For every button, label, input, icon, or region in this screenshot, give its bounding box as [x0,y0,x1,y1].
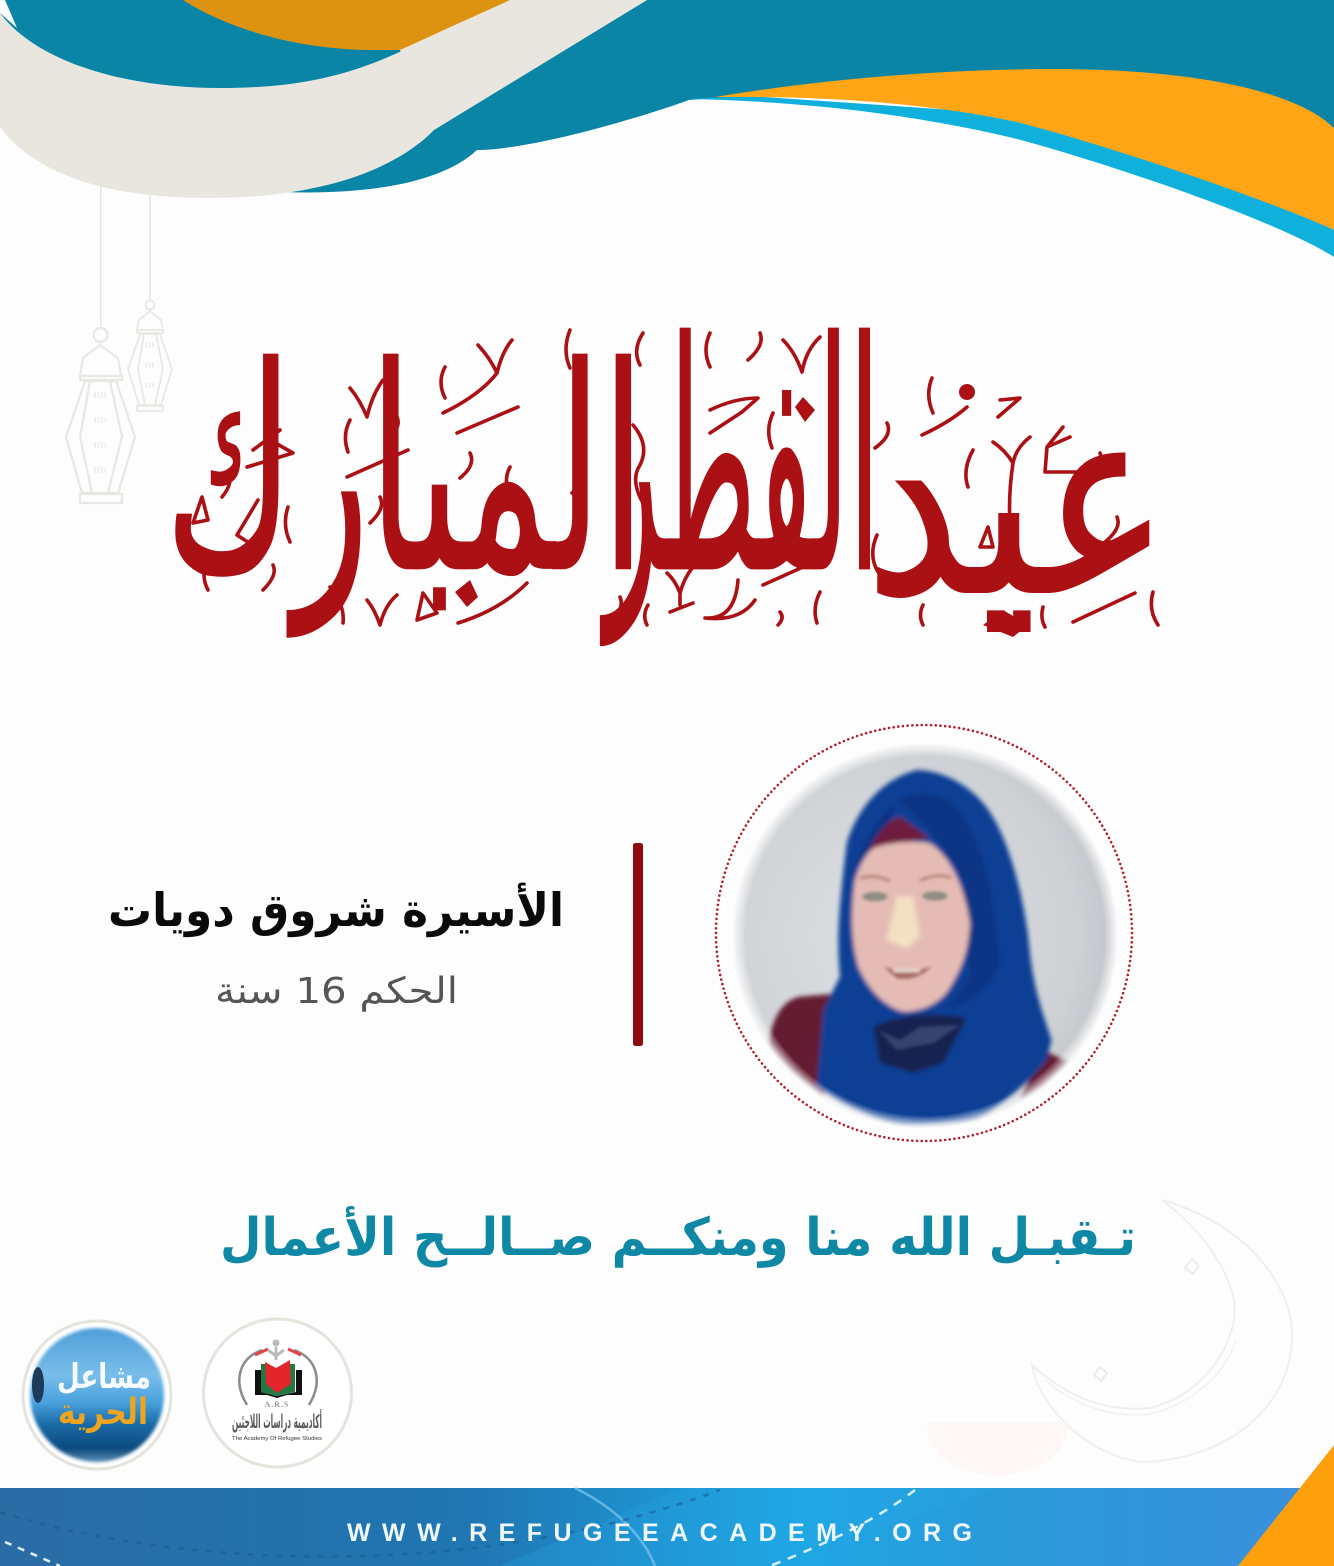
photo [732,743,1118,1129]
large lantern [66,328,135,503]
sentence text: الحكم 16 سنة [215,971,458,1012]
crescent watermark [927,1200,1292,1475]
person [272,1340,280,1346]
portrait photo [716,725,1132,1141]
footer banner [0,1445,1334,1566]
ornamental marks [193,330,1158,637]
dotted ring [716,725,1132,1141]
logo: academy of refugee studies [204,1319,352,1467]
name heading: الأسيرة شروق دويات [108,882,564,937]
logo: academy of refugee studies: أكاديمية دراسات اللاجئين [232,1409,322,1433]
title words: المبارك [165,308,645,637]
lanterns watermark [66,180,172,503]
logo: freedom torches: مشاعل [57,1357,151,1397]
website url: WWW.REFUGEEACADEMY.ORG [347,1519,972,1547]
orange corner [1238,1445,1334,1566]
title words [165,276,1170,655]
flag accents [255,1349,301,1355]
logo: academy of refugee studies: A.R.S [264,1400,290,1409]
greeting line: تـقبـل الله منا ومنكــم صــالــح الأعمال [220,1205,1136,1268]
title words: الفطر [600,276,880,645]
top wave header [0,0,1334,257]
calligraphy title [165,276,1170,655]
logo: academy of refugee studies: The Academy Of Refugee Studies [232,1436,322,1442]
logo: freedom torches: الحرية [58,1392,148,1433]
divider bar [633,843,643,1046]
logo: freedom torches [23,1321,171,1469]
star [1094,1367,1107,1381]
star [1185,1259,1199,1274]
pale shape [927,1422,1068,1475]
laurel [239,1350,317,1405]
small lantern [128,300,172,411]
title words: عيد [865,345,1170,655]
open book [255,1360,302,1398]
